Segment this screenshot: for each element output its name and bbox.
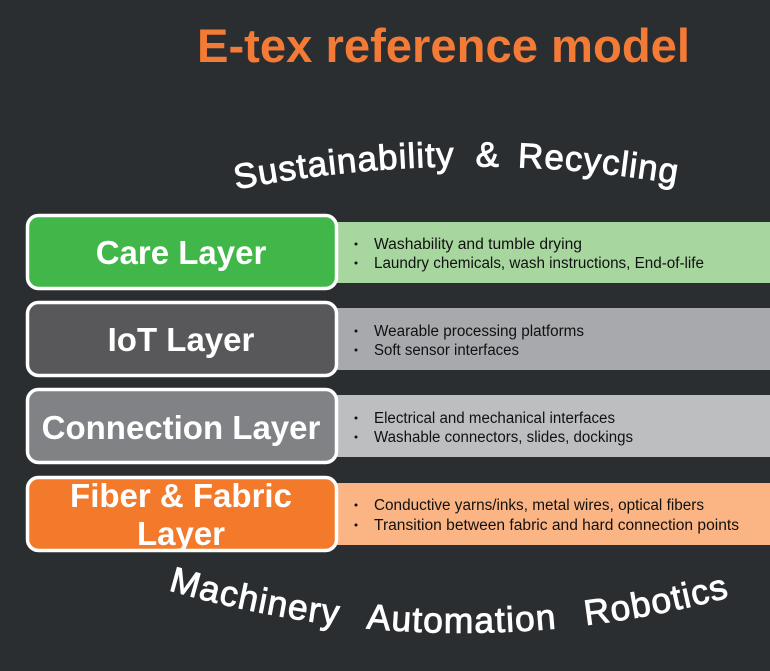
iot details band [336, 308, 770, 370]
fiber details band: Conductive yarns/inks, metal wires, optical fibers [374, 497, 704, 514]
panel: fiber and fabric layer [28, 477, 770, 552]
connection details band: Washable connectors, slides, dockings [374, 429, 633, 446]
iot layer label box [28, 302, 336, 376]
care details band [336, 222, 770, 283]
iot layer label box: IoT Layer [108, 321, 255, 358]
care details band: Washability and tumble drying [374, 236, 582, 253]
care layer label box [28, 216, 336, 288]
fiber details band: Transition between fabric and hard connection points [374, 517, 739, 534]
iot details band: Wearable processing platforms [374, 323, 584, 340]
title: E-tex reference model [197, 19, 690, 72]
fiber and fabric label box: Layer [137, 515, 225, 552]
arc labels: machinery, automation, robotics: Machinery Automation Robotics [170, 566, 728, 634]
panel: iot layer [28, 302, 770, 376]
connection details band [336, 395, 770, 457]
iot details band: Soft sensor interfaces [374, 342, 519, 359]
connection layer label box [28, 390, 336, 462]
connection details band: Electrical and mechanical interfaces [374, 410, 615, 427]
care details band: Laundry chemicals, wash instructions, End-of-life [374, 255, 704, 272]
arc heading: sustainability and recycling: Sustainability & Recycling [234, 142, 678, 190]
care layer label box: Care Layer [96, 234, 266, 271]
panel: connection layer [28, 390, 770, 462]
fiber and fabric label box [28, 477, 336, 552]
panel: care layer [28, 216, 770, 288]
fiber details band [336, 483, 770, 545]
fiber and fabric label box: Fiber & Fabric [70, 477, 292, 514]
connection layer label box: Connection Layer [42, 409, 321, 446]
